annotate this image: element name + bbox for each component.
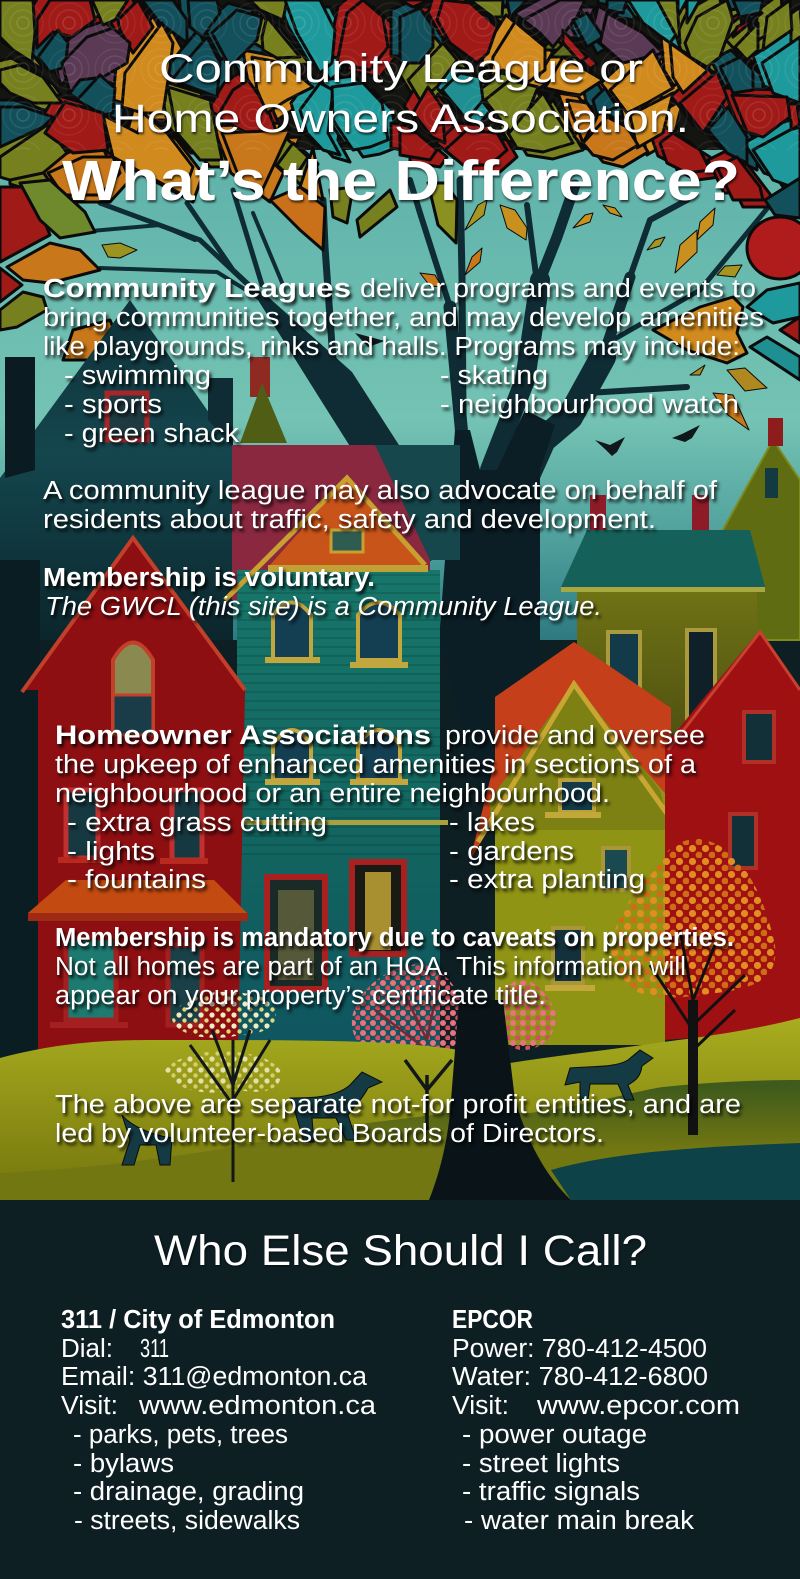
epcor contacts: - power outage — [462, 1421, 647, 1449]
epcor contacts: - street lights — [462, 1450, 620, 1478]
right gable — [706, 440, 800, 640]
epcor contacts — [452, 1306, 740, 1535]
intro paragraph: neighbourhood or an entire neighbourhood. — [55, 780, 610, 808]
red house left — [22, 538, 245, 1050]
ground hills — [0, 1018, 800, 1200]
canopy base — [0, 0, 800, 150]
intro paragraph: bring communities together, and may develop amenities — [43, 304, 764, 332]
city of edmonton contacts: - drainage, grading — [73, 1478, 304, 1506]
intro paragraph: Community Leagues — [43, 275, 351, 303]
pink dotted tree crowns — [352, 964, 556, 1065]
main diagonal branch — [258, 295, 460, 565]
voluntary membership note — [43, 564, 602, 621]
chimney and conifer — [250, 357, 270, 397]
epcor contacts: Visit: — [452, 1392, 509, 1420]
epcor contacts: Water: 780-412-6800 — [452, 1363, 708, 1391]
epcor contacts: - traffic signals — [462, 1478, 640, 1506]
background painting — [0, 0, 800, 1200]
orange tree trunk — [650, 930, 745, 1135]
voluntary membership note: The GWCL (this site) is a Community League. — [45, 593, 602, 621]
green house windows — [273, 602, 400, 780]
programs list: - neighbourhood watch — [440, 391, 739, 419]
programs list: - green shack — [64, 420, 239, 448]
leaf gap fillers — [0, 0, 800, 207]
voluntary membership note: Membership is voluntary. — [43, 564, 375, 592]
city of edmonton contacts: Visit: — [61, 1392, 118, 1420]
mandatory membership note: Not all homes are part of an HOA. This information will — [55, 953, 686, 981]
programs list: - swimming — [64, 362, 211, 390]
city of edmonton contacts: - parks, pets, trees — [73, 1421, 288, 1449]
green house — [237, 570, 440, 1050]
city of edmonton contacts: Dial: — [61, 1335, 113, 1363]
left dark edge — [0, 560, 40, 1060]
city of edmonton contacts: www.edmonton.ca — [138, 1392, 377, 1420]
amenities list: - lights — [67, 838, 155, 866]
intro paragraph: provide and oversee — [445, 722, 705, 750]
city of edmonton contacts: 311 — [140, 1335, 169, 1363]
intro paragraph — [55, 720, 705, 808]
olive house lower with orange roof — [495, 705, 665, 1045]
lower windows — [267, 877, 325, 989]
amenities list: - fountains — [67, 866, 206, 894]
amenities list: - lakes — [449, 809, 535, 837]
city of edmonton contacts — [61, 1306, 377, 1535]
city of edmonton contacts: 311 / City of Edmonton — [61, 1306, 335, 1334]
pink tree trunk — [405, 1060, 452, 1130]
canopy leaves — [0, 0, 800, 200]
title — [62, 47, 740, 213]
city of edmonton contacts: - bylaws — [73, 1450, 174, 1478]
city of edmonton contacts: - streets, sidewalks — [74, 1507, 300, 1535]
epcor contacts: - water main break — [464, 1507, 694, 1535]
olive house — [577, 590, 757, 820]
who else heading: Who Else Should I Call? — [154, 1227, 647, 1275]
amenities list: - extra grass cutting — [67, 809, 327, 837]
red house right — [665, 630, 800, 1040]
animals — [122, 1050, 653, 1165]
intro paragraph — [43, 275, 764, 361]
programs list: - skating — [440, 362, 548, 390]
closing note: The above are separate not-for profit entities, and are — [55, 1091, 741, 1119]
orange dotted tree crown — [611, 839, 775, 997]
intro paragraph: deliver programs and events to — [360, 275, 756, 303]
bottom panel — [0, 1200, 800, 1579]
mandatory membership note: Membership is mandatory due to caveats on properties. — [55, 924, 734, 952]
tree branches — [80, 180, 770, 480]
epcor contacts: www.epcor.com — [536, 1392, 740, 1420]
intro paragraph: Homeowner Associations — [55, 720, 431, 750]
trunk upper — [439, 410, 555, 830]
door — [66, 938, 116, 1020]
advocacy paragraph: residents about traffic, safety and development. — [43, 506, 656, 534]
homeowner associations text block — [55, 720, 741, 1148]
closing note: led by volunteer-based Boards of Directors. — [55, 1120, 604, 1148]
mandatory membership note: appear on your property’s certificate title. — [55, 982, 546, 1010]
title line 3: What’s the Difference? — [62, 149, 740, 213]
white dotted tree — [165, 992, 281, 1182]
amenities list: - gardens — [449, 838, 574, 866]
intro paragraph: the upkeep of enhanced amenities in sections of a — [55, 751, 697, 779]
sky — [0, 150, 800, 640]
advocacy paragraph: A community league may also advocate on behalf of — [43, 477, 718, 505]
title line 1: Community League or — [159, 47, 643, 91]
birds — [355, 333, 700, 456]
dark house left — [0, 300, 233, 640]
closing note — [55, 1091, 741, 1148]
title line 2: Home Owners Association. — [112, 97, 689, 141]
intro paragraph: like playgrounds, rinks and halls. Programs may include: — [43, 333, 740, 361]
advocacy paragraph — [43, 477, 718, 534]
orange awning — [28, 880, 247, 913]
amenities list: - extra planting — [449, 866, 645, 894]
epcor contacts: Power: 780-412-4500 — [452, 1335, 707, 1363]
programs list: - sports — [64, 391, 162, 419]
programs list — [64, 362, 739, 448]
hanging and side leaves — [0, 148, 800, 430]
red roof house — [232, 445, 430, 600]
epcor contacts: EPCOR — [452, 1306, 533, 1334]
community leagues text block — [43, 275, 764, 621]
city of edmonton contacts: Email: 311@edmonton.ca — [61, 1363, 368, 1391]
leaf texture — [0, 0, 800, 150]
mandatory membership note — [55, 924, 734, 1010]
amenities list — [67, 809, 645, 894]
